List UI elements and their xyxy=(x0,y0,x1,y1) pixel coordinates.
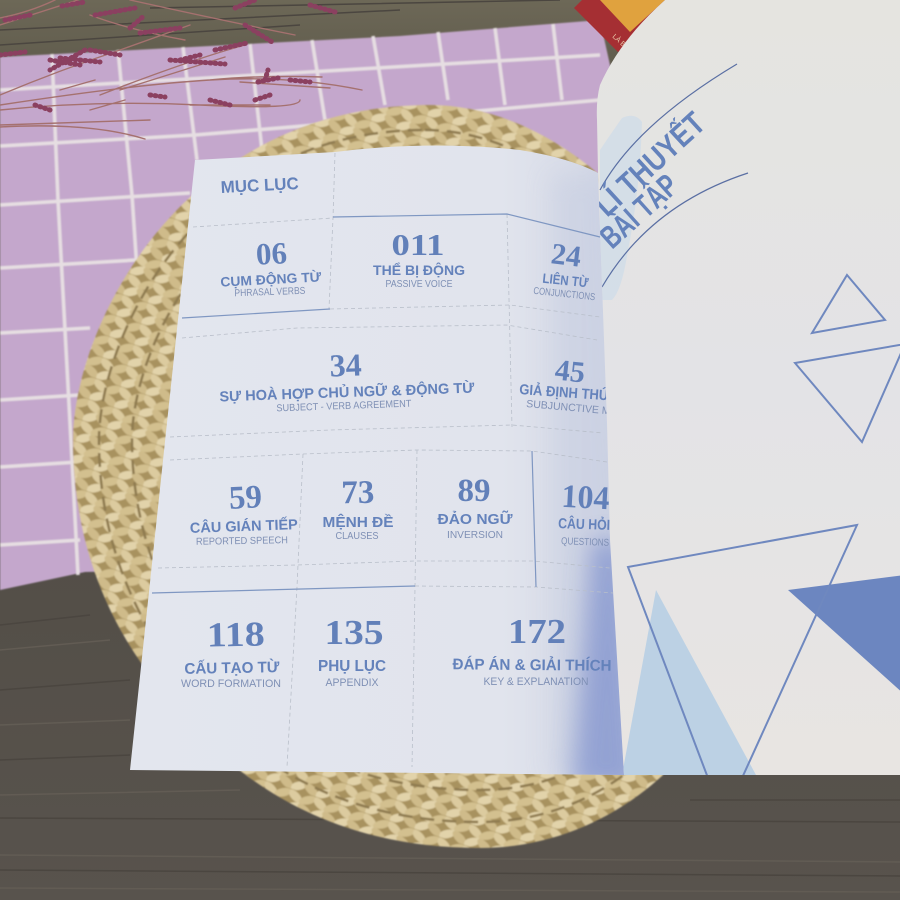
entry: Liên từ: 24 xyxy=(549,237,583,274)
light blue filled triangle xyxy=(622,590,756,775)
entry: Câu gián tiếp xyxy=(190,479,298,548)
entry: Cấu tạo từ: CẤU TẠO TỪ xyxy=(184,658,280,678)
entry: Cụm động từ: 06 xyxy=(255,235,288,272)
curved heading rules xyxy=(600,64,748,287)
entry: Giả định thức: 45 xyxy=(553,354,587,390)
large triangle outline xyxy=(628,525,857,778)
entry: Phụ lục: APPENDIX xyxy=(326,677,379,689)
orange and red book in background: LÀ BẠN xyxy=(611,32,635,55)
entry: Đảo ngữ: 89 xyxy=(458,473,490,509)
entry: Cấu tạo từ: 118 xyxy=(206,614,265,655)
lilac tiled mat xyxy=(0,20,640,590)
entry: Phụ lục: PHỤ LỤC xyxy=(318,658,386,675)
entry: Phụ lục xyxy=(318,613,386,689)
entry: Phụ lục: 135 xyxy=(324,613,384,652)
dried pink flower branches xyxy=(0,0,362,139)
entry: Câu hỏi xyxy=(558,479,610,549)
entry: Giả định thức: SUBJUNCTIVE MOOD xyxy=(526,398,635,419)
entry: Thể bị động xyxy=(373,227,465,290)
panel: right page xyxy=(587,0,900,778)
entry: Giả định thức: GIẢ ĐỊNH THỨC xyxy=(519,380,620,405)
entry: Câu hỏi: CÂU HỎI xyxy=(558,514,610,534)
entry: Liên từ: CONJUNCTIONS xyxy=(533,286,596,303)
entry: Câu gián tiếp: 59 xyxy=(228,479,263,517)
icon: small triangle outline xyxy=(812,275,885,333)
heading: Bài tập: BÀI TẬP xyxy=(593,167,685,255)
entry: Cấu tạo từ: WORD FORMATION xyxy=(181,678,281,690)
entry: Mệnh đề: 73 xyxy=(341,475,375,511)
entry: Sự hoà hợp chủ ngữ và động từ: 34 xyxy=(329,346,362,384)
entry: Đáp án và giải thích: KEY & EXPLANATION xyxy=(484,676,589,688)
entry: Đáp án và giải thích xyxy=(452,612,612,688)
entry: Câu gián tiếp: CÂU GIÁN TIẾP xyxy=(190,515,298,537)
entry: Mệnh đề: MỆNH ĐỀ xyxy=(322,513,394,531)
heading: Mục lục: MỤC LỤC xyxy=(220,174,299,197)
icon: inverted triangle outline xyxy=(795,344,900,442)
left page sheet xyxy=(130,145,625,775)
heading: Lí thuyết: LÍ THUYẾT xyxy=(587,104,712,223)
entry: Đáp án và giải thích: 172 xyxy=(508,612,566,651)
entry: Cấu tạo từ xyxy=(181,614,281,690)
entry: Mệnh đề xyxy=(322,475,394,542)
entry: Cụm động từ: PHRASAL VERBS xyxy=(234,286,306,299)
orange and red book in background xyxy=(574,0,665,55)
entry: Đáp án và giải thích: ĐÁP ÁN & GIẢI THÍCH xyxy=(452,656,612,675)
entry: Thể bị động: THỂ BỊ ĐỘNG xyxy=(373,263,465,278)
entry: Thể bị động: 011 xyxy=(392,227,444,262)
right page sheet xyxy=(590,0,900,775)
entry: Thể bị động: PASSIVE VOICE xyxy=(386,279,453,290)
entry: Đảo ngữ xyxy=(438,473,514,541)
entry: Mệnh đề: CLAUSES xyxy=(336,531,379,542)
light blue decorative shape behind heading xyxy=(600,116,642,300)
entry: Giả định thức xyxy=(519,354,635,419)
entry: Sự hoà hợp chủ ngữ và động từ: SUBJECT - VERB AGREEMENT xyxy=(276,399,412,414)
entry: Câu hỏi: 104 xyxy=(561,479,610,517)
entry: Liên từ xyxy=(533,237,596,303)
entry: Sự hoà hợp chủ ngữ và động từ: SỰ HOÀ HỢP CHỦ NGỮ & ĐỘNG TỪ xyxy=(219,379,476,405)
page shadow near spine xyxy=(551,183,624,775)
entry: Đảo ngữ: INVERSION xyxy=(447,530,503,541)
entry: Sự hoà hợp chủ ngữ và động từ xyxy=(219,346,476,414)
round woven straw placemat xyxy=(73,105,760,848)
entry: Cụm động từ xyxy=(220,235,322,299)
entry: Liên từ: LIÊN TỪ xyxy=(542,271,590,290)
entry: Đảo ngữ: ĐẢO NGỮ xyxy=(438,510,514,528)
dark blue filled triangle xyxy=(788,575,900,695)
table grid lines xyxy=(152,153,613,767)
entry: Câu gián tiếp: REPORTED SPEECH xyxy=(196,535,288,548)
entry: Cụm động từ: CỤM ĐỘNG TỪ xyxy=(220,269,322,290)
panel: left page contents xyxy=(130,145,640,790)
entry: Câu hỏi: QUESTIONS xyxy=(561,536,610,549)
